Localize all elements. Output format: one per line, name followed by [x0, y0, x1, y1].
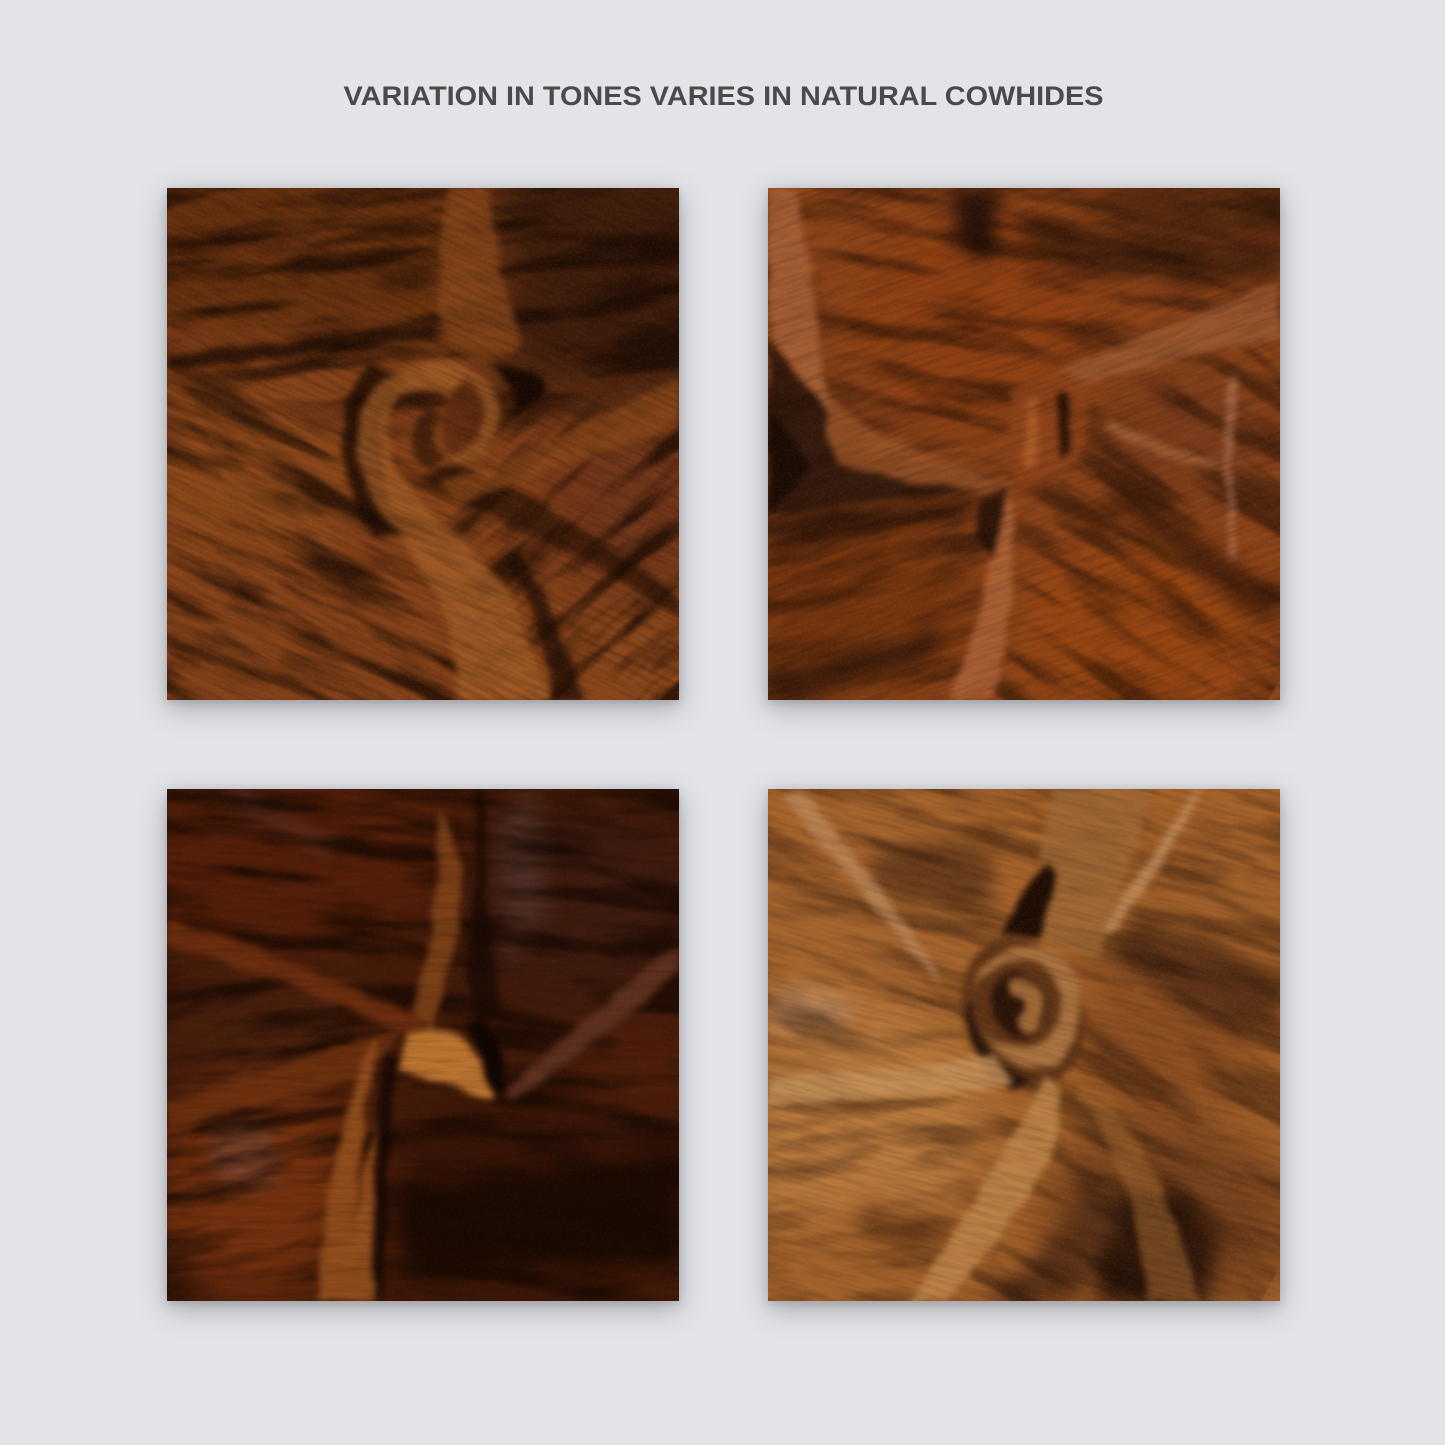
swirl highlights — [357, 188, 679, 700]
swirl and fold highlights — [768, 789, 1202, 1301]
lower dark crease — [507, 548, 582, 700]
dark crease right of swirl — [487, 363, 547, 423]
fold highlights — [768, 188, 1280, 700]
dark crease left of swirl — [342, 363, 407, 538]
fur streaks — [167, 188, 679, 700]
panel: dark chocolate brindle cowhide fold — [167, 789, 679, 1301]
lower right fold — [417, 463, 679, 618]
fur streaks — [768, 188, 1280, 700]
fold highlights — [167, 789, 679, 1301]
fur streaks — [167, 789, 679, 1301]
title: VARIATION IN TONES VARIES IN NATURAL COWHIDES — [344, 81, 1104, 111]
fold edge — [167, 326, 437, 370]
dark left recess — [768, 338, 1008, 518]
panel: light tan brindle cowhide swirl — [768, 789, 1280, 1301]
panel: red-brown brindle cowhide knot — [768, 188, 1280, 700]
fur streaks — [768, 789, 1280, 1301]
panel: medium brown brindle cowhide swirl — [167, 188, 679, 700]
